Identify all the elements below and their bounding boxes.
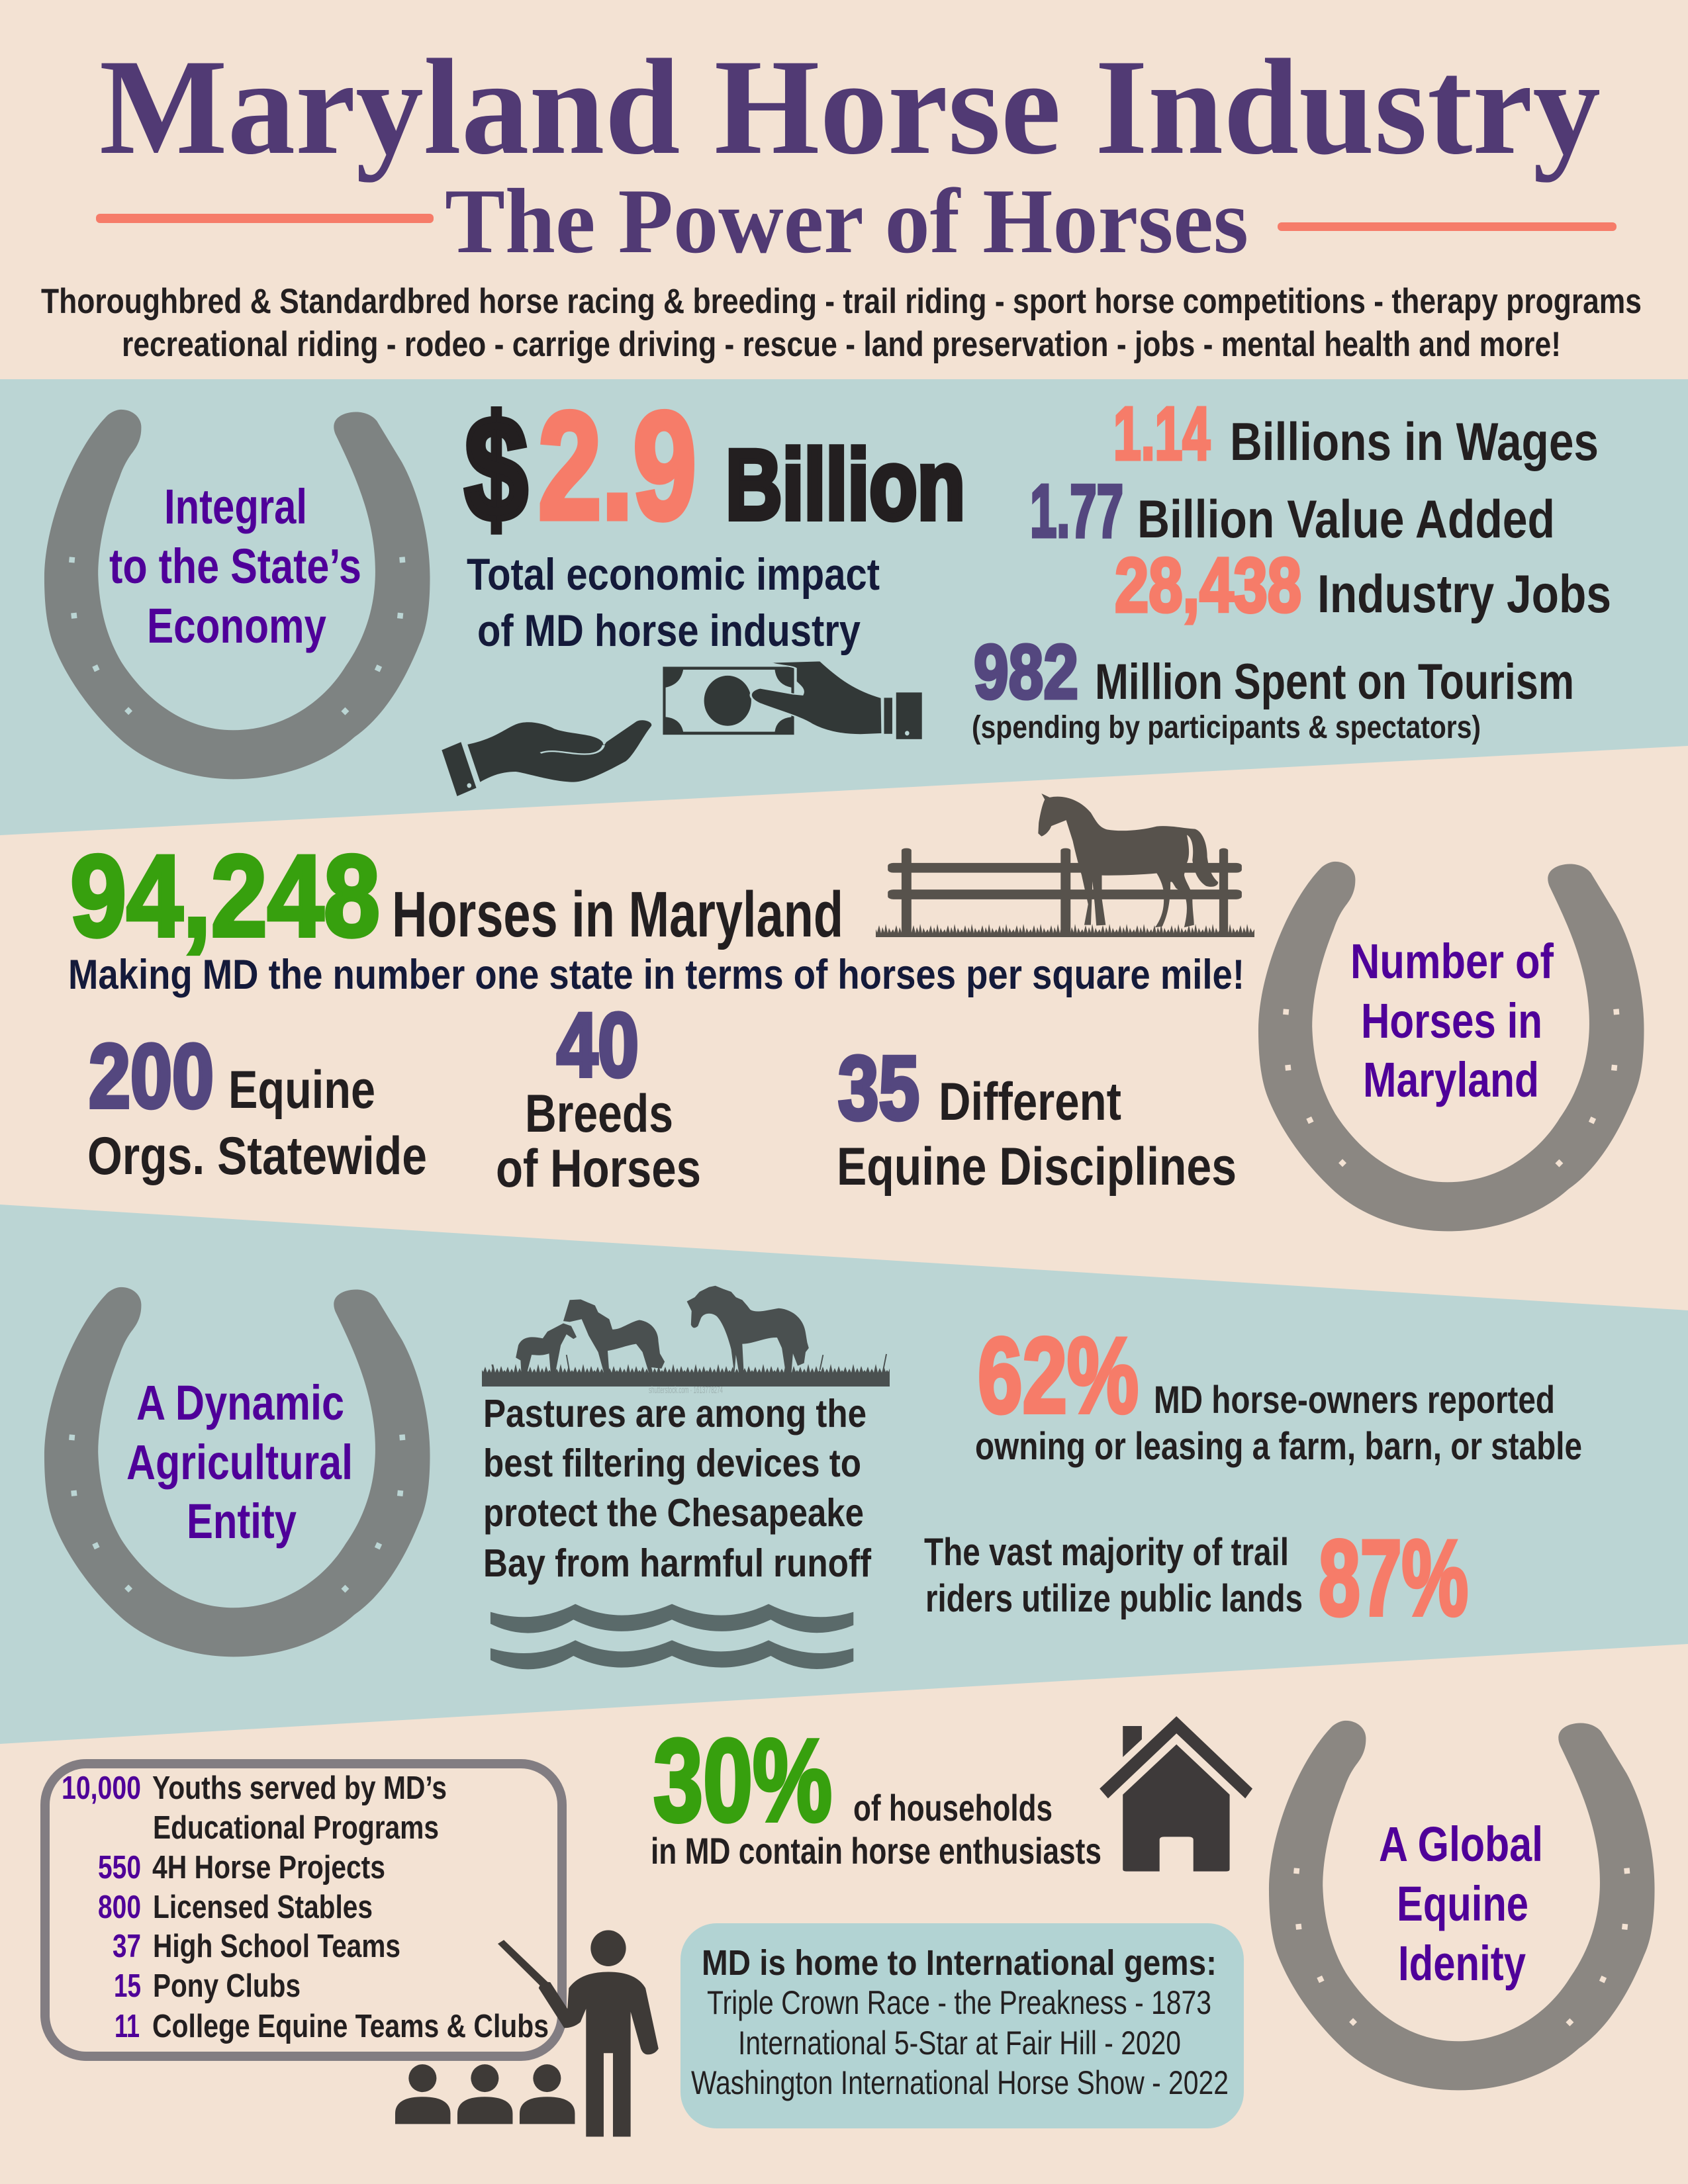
stat: wages: 1.14 xyxy=(1113,392,1210,475)
horseshoe label global identity: Idenity xyxy=(1398,1936,1526,1991)
callout: international gems: International 5-Star at Fair Hill - 2020 xyxy=(738,2025,1181,2062)
subtitle left rule xyxy=(96,214,434,223)
stat: 62 percent: 62% xyxy=(978,1316,1139,1435)
stat: breeds: 40 xyxy=(557,995,639,1096)
horseshoe label economy: Integral xyxy=(164,479,307,534)
education list: Licensed Stables xyxy=(153,1889,373,1925)
icon: horseshoe global identity xyxy=(1269,1721,1655,2090)
stat: equine orgs: Orgs. Statewide xyxy=(87,1126,427,1186)
stat: 62 percent: MD horse-owners reported xyxy=(1154,1379,1555,1422)
pasture text: protect the Chesapeake xyxy=(483,1491,864,1535)
stat: wages: Billions in Wages xyxy=(1230,412,1599,472)
stat: value added: 1.77 xyxy=(1030,469,1123,553)
teal band: economy xyxy=(0,379,1688,835)
horseshoe label agriculture: Entity xyxy=(187,1494,297,1549)
stat: 87 percent xyxy=(924,1518,1468,1638)
icon: horseshoe number of horses xyxy=(1258,862,1644,1231)
icon: house xyxy=(1100,1716,1252,1872)
stat: disciplines: Equine Disciplines xyxy=(837,1137,1237,1197)
stat: disciplines: 35 xyxy=(838,1038,919,1139)
stat: total impact: $ xyxy=(465,385,528,552)
stat: tourism: (spending by participants & spectators) xyxy=(972,710,1481,745)
pasture text: Bay from harmful runoff xyxy=(483,1541,871,1585)
icon: grazing horses xyxy=(482,1286,890,1396)
stat: wages xyxy=(1113,392,1599,475)
stat: total impact: of MD horse industry xyxy=(477,606,861,656)
stat: households xyxy=(651,1715,1102,1872)
education box xyxy=(45,1764,562,2056)
icon: hands exchanging money xyxy=(442,661,922,796)
education list: 37 xyxy=(113,1929,141,1964)
education panel xyxy=(45,1764,659,2137)
subtitle: The Power of Horses xyxy=(445,170,1248,273)
horseshoe label number of horses: Horses in xyxy=(1361,993,1542,1048)
stat: total impact: Total economic impact xyxy=(467,549,880,600)
panel: global identity xyxy=(45,1715,1655,2137)
horseshoe label global identity: Equine xyxy=(1397,1876,1528,1931)
icon: horseshoe economy xyxy=(44,410,430,779)
subtitle right rule xyxy=(1278,222,1617,231)
horseshoe label economy: to the State’s xyxy=(109,539,361,594)
stat: breeds xyxy=(496,995,701,1199)
callout: international gems: MD is home to International gems: xyxy=(702,1943,1217,1983)
stat: horse count xyxy=(70,832,843,961)
stat: equine orgs: Equine xyxy=(228,1060,375,1120)
education list xyxy=(62,1770,549,2044)
education list: 4H Horse Projects xyxy=(152,1850,385,1886)
intro text xyxy=(41,282,1642,364)
panel: number of horses xyxy=(68,794,1644,1231)
education list: Educational Programs xyxy=(153,1810,439,1846)
stat: households: of households xyxy=(853,1787,1053,1829)
horses per square mile note: Making MD the number one state in terms of horses per square mile! xyxy=(68,952,1244,998)
stat: value added: Billion Value Added xyxy=(1137,490,1555,549)
horseshoe label number of horses xyxy=(1350,934,1554,1107)
stat: horse count: Horses in Maryland xyxy=(392,878,843,950)
icon: grazing horses: shutterstock.com · 1613778274 xyxy=(649,1385,723,1396)
horseshoe label number of horses: Maryland xyxy=(1363,1052,1539,1107)
stat: disciplines: Different xyxy=(939,1072,1121,1132)
callout: international gems: Washington International Horse Show - 2022 xyxy=(691,2064,1229,2101)
education list: Youths served by MD’s xyxy=(152,1770,447,1806)
icon: presenter and audience xyxy=(395,1930,659,2137)
stat: equine orgs xyxy=(87,1026,427,1186)
title: Maryland Horse Industry xyxy=(99,31,1601,183)
stat: horse count: 94,248 xyxy=(70,832,380,961)
education list: College Equine Teams & Clubs xyxy=(152,2009,549,2044)
stat: jobs xyxy=(1115,542,1611,628)
education list: 800 xyxy=(98,1889,141,1925)
education list: 10,000 xyxy=(62,1770,141,1806)
horseshoe label agriculture xyxy=(126,1375,353,1549)
horseshoe label global identity: A Global xyxy=(1379,1817,1543,1872)
stat: tourism xyxy=(972,629,1574,745)
stat: households: 30% xyxy=(653,1715,832,1846)
horseshoe label global identity xyxy=(1379,1817,1543,1991)
stat: 87 percent: riders utilize public lands xyxy=(925,1577,1303,1620)
callout: international gems: Triple Crown Race - the Preakness - 1873 xyxy=(707,1984,1211,2021)
teal band: agriculture xyxy=(0,1205,1688,1744)
horseshoe label agriculture: Agricultural xyxy=(126,1435,353,1490)
callout: international gems xyxy=(680,1923,1244,2128)
stat: total impact: Billion xyxy=(726,429,965,540)
horseshoe label agriculture: A Dynamic xyxy=(136,1375,344,1430)
header xyxy=(41,31,1642,364)
icon: horseshoe agriculture xyxy=(44,1287,430,1657)
stat: breeds: Breeds xyxy=(525,1084,673,1144)
pasture text: best filtering devices to xyxy=(483,1441,861,1485)
stat: breeds: of Horses xyxy=(496,1139,701,1199)
stat: jobs: 28,438 xyxy=(1115,542,1301,628)
panel: agriculture xyxy=(44,1286,1582,1669)
stat: households: in MD contain horse enthusiasts xyxy=(651,1830,1102,1872)
stat: total impact xyxy=(465,381,965,656)
stat: equine orgs: 200 xyxy=(89,1026,214,1127)
horseshoe label number of horses: Number of xyxy=(1350,934,1554,989)
pasture text xyxy=(483,1392,871,1585)
stat: tourism: Million Spent on Tourism xyxy=(1095,654,1574,710)
stat: tourism: 982 xyxy=(974,629,1078,715)
education list: 11 xyxy=(115,2009,140,2044)
icon: horse behind fence xyxy=(876,794,1254,937)
education list: Pony Clubs xyxy=(153,1968,301,2004)
stat: jobs: Industry Jobs xyxy=(1317,565,1611,624)
stat: 62 percent xyxy=(975,1316,1582,1468)
education list: 550 xyxy=(98,1850,141,1886)
icon: water waves xyxy=(491,1604,853,1669)
stat: 87 percent: The vast majority of trail xyxy=(924,1531,1289,1574)
stat: disciplines xyxy=(837,1038,1237,1197)
panel: economy xyxy=(44,381,1611,796)
stat: value added xyxy=(1030,469,1555,553)
stat: total impact: 2.9 xyxy=(538,381,696,551)
education list: High School Teams xyxy=(153,1929,400,1964)
pasture text: Pastures are among the xyxy=(483,1392,867,1435)
stat: 87 percent: 87% xyxy=(1319,1518,1468,1638)
horseshoe label economy xyxy=(109,479,361,653)
education list: 15 xyxy=(114,1968,141,2004)
horseshoe label economy: Economy xyxy=(147,598,326,653)
